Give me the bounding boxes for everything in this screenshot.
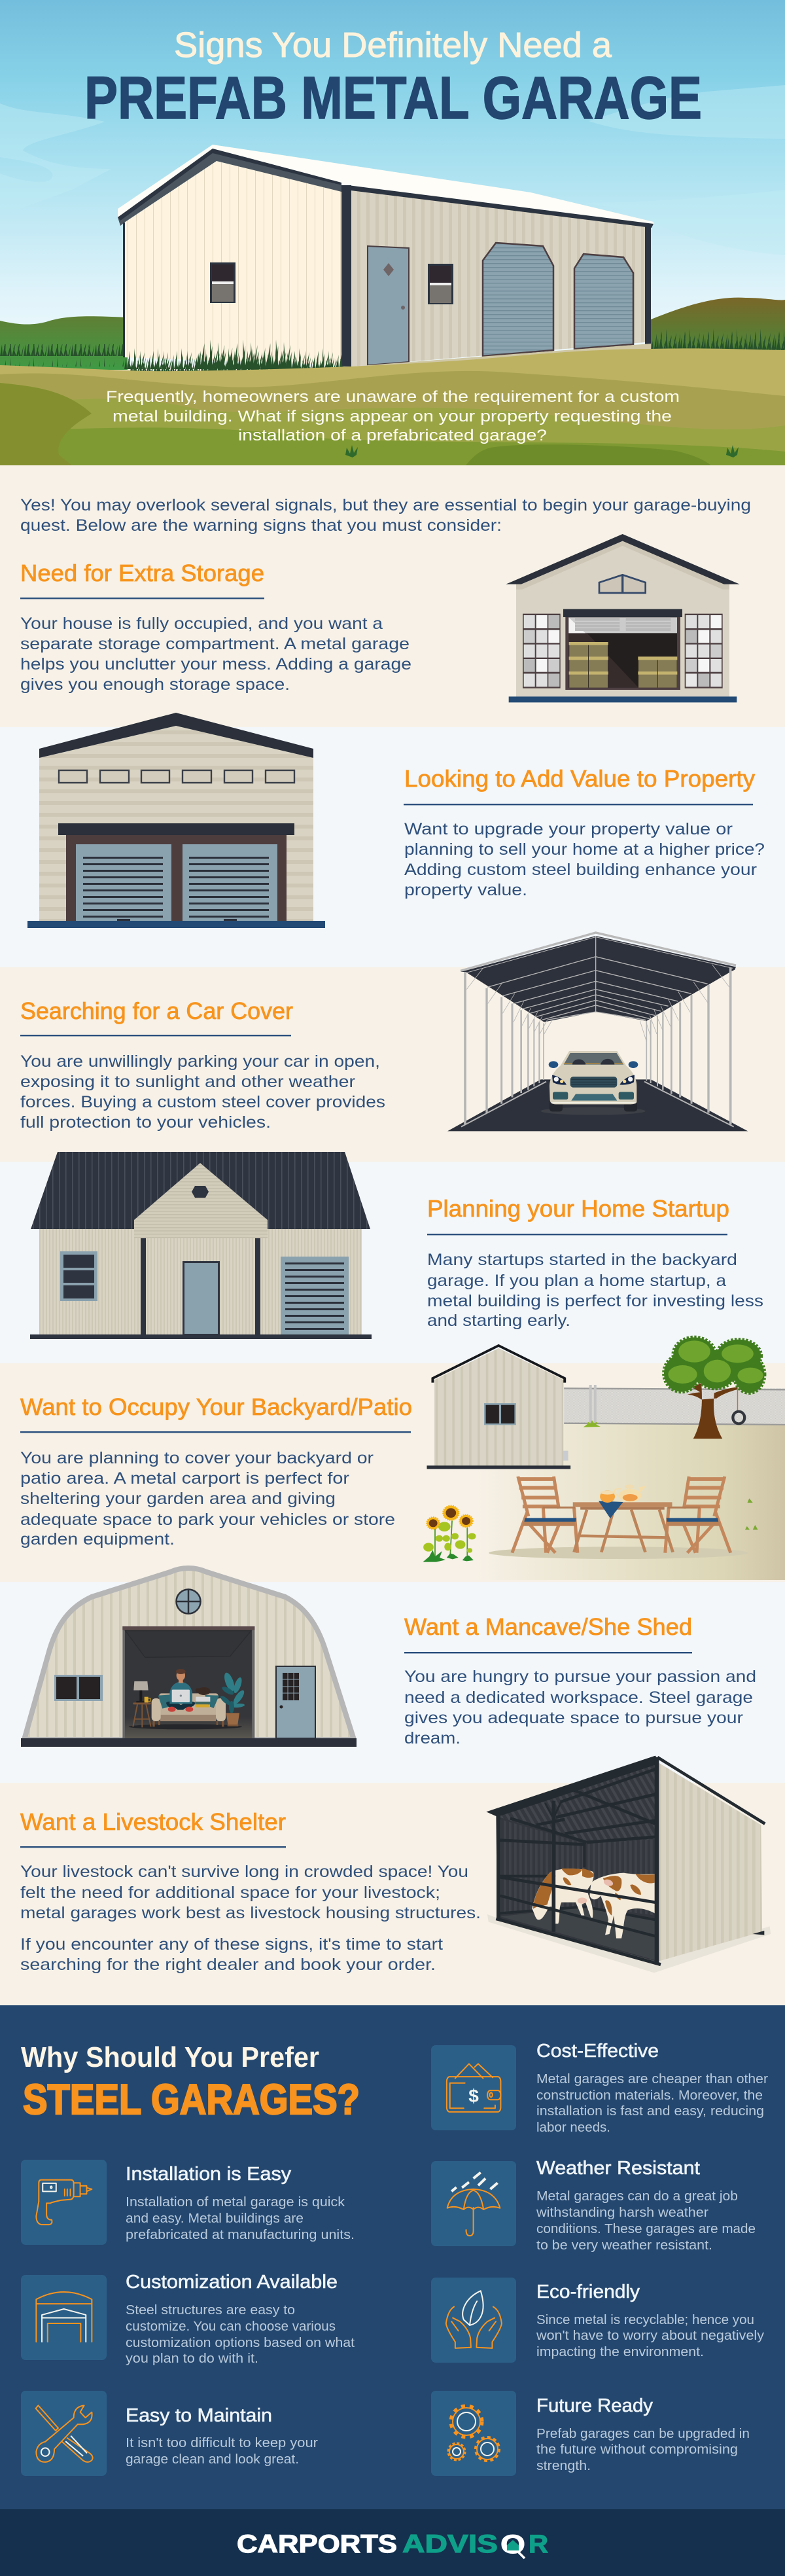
panel: mancave she shed (0, 1568, 785, 1783)
heading: Weather Resistant (536, 2158, 700, 2179)
awning (58, 823, 294, 835)
door (276, 1666, 315, 1738)
panel background (0, 1363, 785, 1582)
icon box (21, 2160, 107, 2245)
door (183, 1262, 218, 1335)
illustration: home garage (30, 1152, 372, 1339)
body text: gives you enough storage space. (20, 675, 290, 694)
description: customization options based on what (126, 2336, 355, 2350)
porch posts (141, 1238, 260, 1334)
heading: Cost-Effective (536, 2041, 659, 2062)
heading: Customization Available (126, 2272, 338, 2293)
body text (20, 1449, 395, 1548)
panel: livestock shelter (0, 1756, 785, 2005)
clerestory windows (59, 770, 294, 783)
icon: umbrella (447, 2173, 500, 2236)
front wall (124, 161, 341, 365)
body text: helps you unclutter your mess. Adding a garage (20, 655, 411, 673)
folders and cat (195, 1687, 211, 1708)
description: and easy. Metal buildings are (126, 2211, 304, 2226)
description: Metal garages are cheaper than other (536, 2072, 768, 2086)
item: maintain (21, 2391, 318, 2476)
body text: Adding custom steel building enhance your (404, 861, 757, 879)
heading: Searching for a Car Cover (20, 997, 293, 1024)
description: won't have to worry about negatively (536, 2329, 764, 2343)
description (536, 2189, 756, 2253)
heading rule (404, 1652, 692, 1653)
posts (461, 967, 734, 1127)
left door (76, 844, 171, 921)
body text (20, 1863, 481, 1922)
body text (20, 1052, 385, 1132)
roof underside (499, 1762, 655, 1844)
closing text: searching for the right dealer and book your order. (20, 1956, 436, 1974)
heading rule (20, 1035, 291, 1036)
logo: CARPORTS (237, 2530, 397, 2558)
car (541, 1051, 646, 1115)
icon: wallet (447, 2064, 500, 2112)
description (536, 2072, 768, 2135)
wall (39, 726, 313, 921)
logo: R (529, 2530, 548, 2558)
slab (27, 921, 325, 928)
body text: Many startups started in the backyard (427, 1251, 737, 1269)
description: Prefab garages can be upgraded in (536, 2427, 750, 2441)
walls (500, 1819, 584, 1913)
side wall (659, 1762, 762, 1961)
sunflowers (423, 1506, 476, 1562)
icon: gears (448, 2406, 499, 2461)
roof (39, 713, 313, 758)
icon box (431, 2278, 516, 2363)
heading: Want to Occupy Your Backyard/Patio (20, 1393, 412, 1420)
description: Installation of metal garage is quick (126, 2195, 345, 2209)
table shadow (489, 1547, 748, 1559)
eave trim (347, 185, 654, 228)
panel: home startup (0, 1152, 785, 1363)
icon: tools (36, 2405, 93, 2462)
wall (516, 541, 729, 697)
clouds (0, 85, 785, 255)
description: strength. (536, 2459, 591, 2473)
heading rule (20, 1846, 286, 1848)
icon: hands and leaf (446, 2291, 502, 2348)
body text: felt the need for additional space for your livestock; (20, 1884, 440, 1902)
frame behind cows (500, 1769, 655, 1920)
footer background (0, 2509, 785, 2576)
roof framing (461, 933, 736, 1020)
tree (664, 1337, 765, 1439)
item: cost effective (431, 2041, 768, 2135)
body text (404, 820, 765, 899)
knee braces (466, 964, 729, 1042)
body text: need a dedicated workspace. Steel garage (404, 1689, 753, 1707)
hero text (106, 388, 680, 444)
awning (563, 609, 682, 617)
body text: You are hungry to pursue your passion and (404, 1668, 756, 1686)
description: Since metal is recyclable; hence you (536, 2313, 754, 2327)
cow left (532, 1869, 594, 1923)
panel: add value to property (0, 713, 785, 967)
description: the future without compromising (536, 2442, 738, 2457)
side table and lamp (133, 1681, 151, 1727)
logo: ADVIS (402, 2530, 498, 2558)
body text: garage. If you plan a home startup, a (427, 1272, 726, 1290)
description: labor needs. (536, 2120, 610, 2135)
grass tuft (584, 1420, 601, 1427)
intro text: Yes! You may overlook several signals, but they are essential to begin your garage-buying (20, 496, 751, 514)
body text: metal garages work best as livestock housing structures. (20, 1904, 481, 1922)
right window (685, 614, 723, 689)
ground (0, 348, 785, 465)
heading: Looking to Add Value to Property (404, 765, 755, 792)
item: future ready (431, 2391, 750, 2476)
windows (210, 262, 453, 304)
boxes (569, 642, 677, 688)
section title: STEEL GARAGES? (23, 2075, 360, 2123)
body text: separate storage compartment. A metal garage (20, 635, 410, 653)
heading rule (427, 1234, 727, 1235)
heading: Planning your Home Startup (427, 1195, 729, 1222)
body text (427, 1251, 763, 1330)
floor (500, 1906, 655, 1960)
panel background (0, 1783, 785, 2005)
description: to be very weather resistant. (536, 2238, 712, 2253)
description (126, 2195, 355, 2242)
hero text: Frequently, homeowners are unaware of the requirement for a custom (106, 388, 680, 406)
potted plant (219, 1672, 246, 1726)
body text: and starting early. (427, 1312, 570, 1330)
body text: Want to upgrade your property value or (404, 820, 733, 838)
roof (506, 534, 740, 584)
heading: Installation is Easy (126, 2164, 292, 2185)
body text (20, 615, 411, 694)
icon box (431, 2045, 516, 2130)
illustration: storage garage (506, 534, 740, 702)
illustration: garage with two doors (27, 713, 325, 928)
slab (351, 344, 651, 367)
description: customize. You can choose various (126, 2319, 336, 2334)
sofa (152, 1693, 226, 1726)
body text: You are planning to cover your backyard or (20, 1449, 374, 1467)
description (536, 2427, 750, 2473)
heading rule (404, 804, 753, 805)
description (536, 2313, 764, 2359)
heading rule (20, 1431, 411, 1433)
body text: sheltering your garden area and giving (20, 1490, 336, 1508)
description: garage clean and look great. (126, 2452, 299, 2467)
icon box (21, 2275, 107, 2360)
table (573, 1484, 673, 1552)
corner trim (753, 1931, 764, 1935)
side window (54, 1675, 103, 1701)
interior (122, 1626, 254, 1739)
gable window (599, 575, 646, 593)
description: Steel structures are easy to (126, 2303, 295, 2317)
closing text: If you encounter any of these signs, it's time to start (20, 1935, 443, 1954)
roof (118, 145, 654, 225)
illustration: mancave (21, 1568, 357, 1747)
item: eco friendly (431, 2278, 764, 2363)
panel background (0, 967, 785, 1162)
description: you plan to do with it. (126, 2352, 258, 2366)
person with laptop (166, 1669, 195, 1712)
window (60, 1251, 97, 1301)
description: It isn't too difficult to keep your (126, 2436, 318, 2450)
roll-up doors (483, 243, 633, 356)
icon: wallet: $ (468, 2086, 479, 2106)
fence (564, 1385, 785, 1425)
panel: why steel garages (0, 2005, 785, 2509)
section title: Why Should You Prefer (21, 2041, 319, 2073)
icon box (21, 2391, 107, 2476)
base (21, 1738, 357, 1747)
round window (176, 1589, 201, 1614)
description: installation is fast and easy, reducing (536, 2104, 764, 2119)
illustration: metal garage (118, 145, 654, 367)
gable trim (118, 151, 341, 226)
wall (39, 1229, 362, 1334)
icon box (431, 2161, 516, 2246)
panel: hero (0, 0, 785, 465)
interior back (496, 1761, 655, 1961)
panel: backyard patio (0, 1337, 785, 1582)
right door (183, 844, 277, 921)
body text: exposing it to sunlight and other weather (20, 1073, 355, 1091)
body text: property value. (404, 881, 527, 899)
body text: You are unwillingly parking your car in open, (20, 1052, 380, 1071)
body text: adequate space to park your vehicles or store (20, 1511, 395, 1529)
roof (31, 1152, 370, 1229)
icon: garage (36, 2292, 92, 2342)
grass tufts (345, 445, 739, 457)
hero text: metal building. What if signs appear on your property requesting the (113, 408, 672, 425)
panel background (0, 2005, 785, 2509)
ground (419, 1422, 785, 1580)
left chair (512, 1476, 578, 1553)
cow right (590, 1873, 655, 1939)
side wall (351, 190, 645, 367)
panel background (0, 465, 785, 727)
intro text: quest. Below are the warning signs that you must consider: (20, 516, 502, 535)
description: prefabricated at manufacturing units. (126, 2228, 355, 2242)
icon: drill (36, 2180, 92, 2225)
logo magnifier O with house: O (500, 2530, 525, 2559)
title: Signs You Definitely Need a (174, 26, 612, 65)
illustration: livestock shelter (486, 1756, 771, 1973)
back grass (0, 327, 785, 367)
hills (0, 298, 785, 370)
description: withstanding harsh weather (536, 2206, 708, 2220)
body text: dream. (404, 1729, 461, 1747)
description: Metal garages can do a great job (536, 2189, 738, 2204)
body text: Your livestock can't survive long in crowded space! You (20, 1863, 468, 1881)
illustration: backyard scene (419, 1337, 785, 1580)
heading: Want a Livestock Shelter (20, 1808, 286, 1835)
hero text: installation of a prefabricated garage? (238, 427, 547, 444)
heading: Eco-friendly (536, 2281, 640, 2302)
description: conditions. These garages are made (536, 2222, 756, 2236)
panel background (0, 1582, 785, 1783)
ground (447, 1079, 748, 1131)
body text: gives you adequate space to pursue your (404, 1709, 743, 1727)
description (126, 2436, 318, 2467)
panel: car cover (0, 933, 785, 1162)
illustration: carport with car (447, 933, 748, 1131)
body text: patio area. A metal carport is perfect for (20, 1469, 349, 1488)
body text: Your house is fully occupied, and you want a (20, 615, 383, 633)
body text: full protection to your vehicles. (20, 1113, 271, 1132)
arched wall (24, 1568, 354, 1740)
sky background (0, 0, 785, 367)
slab (30, 1334, 372, 1339)
body text: forces. Buying a custom steel cover provides (20, 1093, 385, 1111)
shed (427, 1346, 570, 1469)
icon box (431, 2391, 516, 2476)
item: installation (21, 2160, 355, 2245)
heading: Easy to Maintain (126, 2405, 272, 2426)
heading: Want a Mancave/She Shed (404, 1613, 692, 1640)
description: construction materials. Moreover, the (536, 2088, 763, 2103)
shadow (487, 1914, 771, 1973)
front grass (124, 338, 343, 372)
closing text (20, 1935, 443, 1974)
roof (461, 936, 736, 1022)
panel background (0, 727, 785, 967)
description: impacting the environment. (536, 2345, 704, 2359)
description (126, 2303, 355, 2366)
small plants (745, 1498, 758, 1530)
item: customization (21, 2272, 355, 2366)
logo (237, 2530, 548, 2559)
intro text (20, 496, 751, 535)
heading: Future Ready (536, 2395, 654, 2416)
body text: garden equipment. (20, 1530, 175, 1548)
section title (21, 2041, 360, 2123)
body text: planning to sell your home at a higher price? (404, 840, 765, 859)
heading: Need for Extra Storage (20, 560, 264, 586)
door frame (66, 835, 287, 921)
garage door (281, 1257, 349, 1334)
title (84, 26, 702, 132)
panel: need for extra storage (0, 465, 785, 727)
body text (404, 1668, 756, 1747)
door opening (565, 617, 680, 690)
footer (0, 2509, 785, 2576)
left window (523, 614, 561, 689)
door (368, 246, 409, 365)
corner posts (123, 185, 651, 367)
panel background (0, 1162, 785, 1363)
item: weather resistant (431, 2158, 756, 2253)
front frame (486, 1756, 765, 1965)
right chair (665, 1476, 731, 1553)
heading rule (20, 598, 264, 599)
slab (509, 696, 737, 702)
body text: metal building is perfect for investing less (427, 1292, 763, 1310)
gable (134, 1163, 268, 1238)
